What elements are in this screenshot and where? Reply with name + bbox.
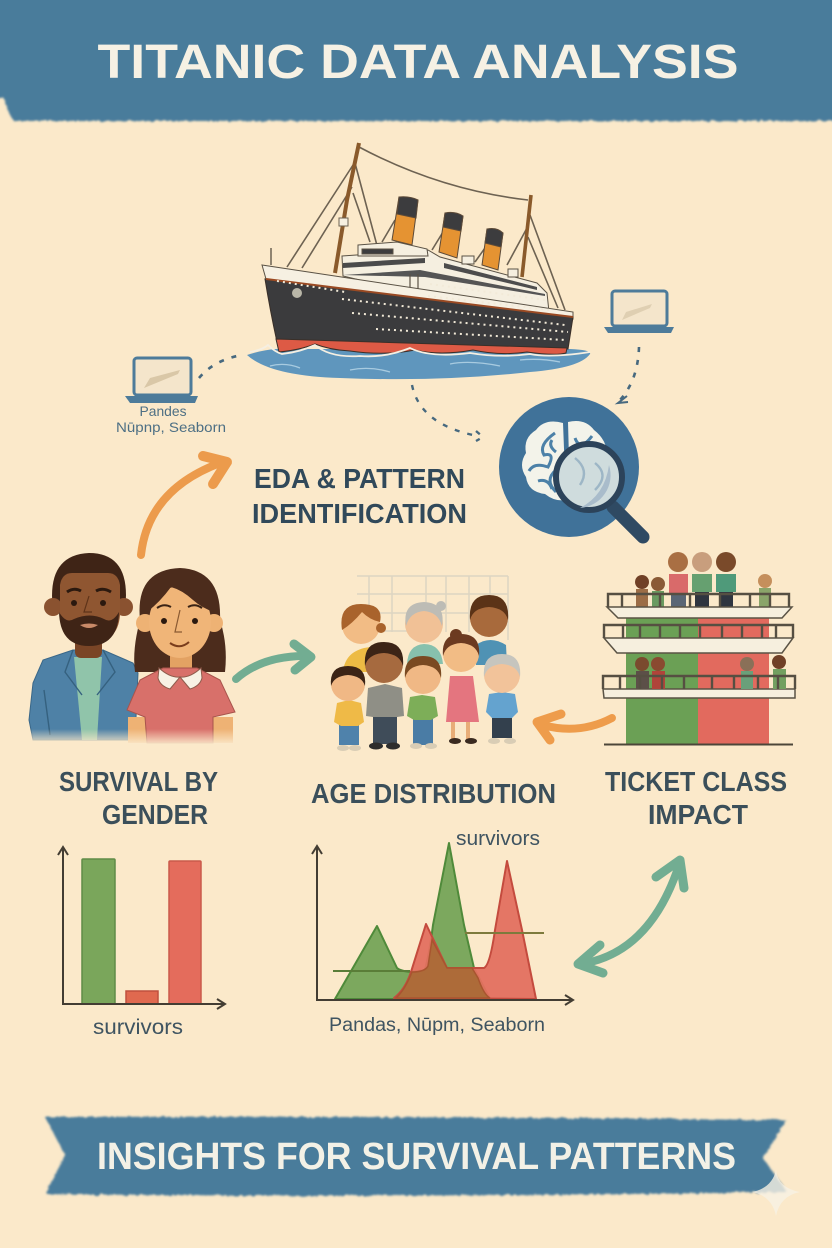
icon: brain with magnifier: [499, 397, 643, 537]
green bar: [82, 859, 115, 1004]
survival colour blocks: [626, 618, 698, 744]
person: man grey shirt: [365, 642, 404, 750]
person: boy green shirt: [405, 656, 441, 749]
person: woman pink dress: [443, 629, 479, 744]
upper deck passengers: [635, 552, 772, 607]
person: grey-haired woman: [405, 601, 446, 664]
funnels: [392, 197, 503, 270]
red keel: [276, 339, 567, 354]
heading: ticket class impact: IMPACT: [648, 799, 748, 830]
water: [247, 349, 590, 379]
arrow: gender to EDA: [141, 456, 227, 555]
icon: laptop left: [125, 358, 198, 403]
green distribution: [335, 843, 490, 999]
superstructure: [342, 242, 549, 312]
bar chart: survival by gender: [58, 847, 225, 1009]
axes: [312, 846, 573, 1005]
arrow: gender to age: [236, 644, 311, 679]
heading: EDA and pattern identification: IDENTIFICATION: [252, 498, 467, 529]
wave crest: [250, 345, 590, 356]
masts and rigging: [271, 143, 565, 310]
person: elderly man blue shirt: [484, 654, 520, 744]
overlap region: [396, 940, 490, 998]
red distribution: [394, 861, 536, 999]
heading: survival by gender: SURVIVAL BY: [59, 766, 218, 797]
heading: ticket class impact: TICKET CLASS: [605, 766, 787, 797]
red bar: [169, 861, 201, 1004]
ticket class ship-deck illustration: [603, 552, 795, 744]
hull emblem: [292, 288, 302, 298]
heading: survival by gender: GENDER: [102, 799, 208, 830]
heading: survival by gender: [59, 766, 218, 830]
arrow: ticket class to age: [537, 714, 612, 740]
sparkle: [752, 1170, 800, 1216]
double arrow: age to ticket class: [578, 860, 684, 973]
heading: ticket class impact: [605, 766, 787, 830]
ship illustration: [247, 143, 590, 379]
heading: age distribution: AGE DISTRIBUTION: [311, 778, 556, 809]
couple illustration: [25, 553, 240, 745]
title: TITANIC DATA ANALYSIS: [98, 36, 738, 89]
heading: EDA and pattern identification: [252, 463, 467, 529]
magnifier: [556, 444, 643, 537]
bar chart caption: survivors: [93, 1016, 183, 1039]
dashed arrow: laptop to brain: [618, 347, 639, 403]
lower deck passengers: [635, 655, 786, 689]
person: man blue back: [470, 595, 508, 665]
woman: [127, 568, 235, 743]
left laptop with library labels: Nūpnp, Seaborn: [116, 419, 226, 435]
library labels left: Pandes: [140, 403, 186, 419]
small red bar: [126, 991, 158, 1004]
right laptop icon: [604, 291, 674, 333]
age group illustration: [331, 576, 520, 751]
background grid: [357, 576, 508, 640]
dashed arrow: ship to brain: [412, 385, 483, 441]
portholes: [277, 281, 568, 340]
person: child yellow shirt: [331, 666, 365, 751]
axes: [58, 847, 225, 1009]
ribbon text: INSIGHTS FOR SURVIVAL PATTERNS: [97, 1136, 736, 1178]
man: [29, 553, 138, 740]
wave highlights: [270, 359, 560, 372]
area chart caption: Pandas, Nūpm, Seaborn: [329, 1015, 545, 1036]
bottom ribbon: [45, 1117, 787, 1196]
left laptop with library labels: [116, 358, 226, 435]
fade at bottom of figures: [25, 729, 240, 745]
decks and railings: [603, 607, 795, 698]
heading: EDA and pattern identification: EDA & PATTERN: [254, 463, 465, 494]
hull: [262, 265, 573, 319]
dashed arrow: laptop to ship: [199, 355, 242, 378]
person: woman yellow: [341, 604, 386, 672]
area chart: age distribution: [312, 843, 573, 1005]
area chart label: survivors: survivors: [456, 828, 540, 850]
title banner: [0, 0, 832, 121]
brain: [522, 421, 607, 500]
